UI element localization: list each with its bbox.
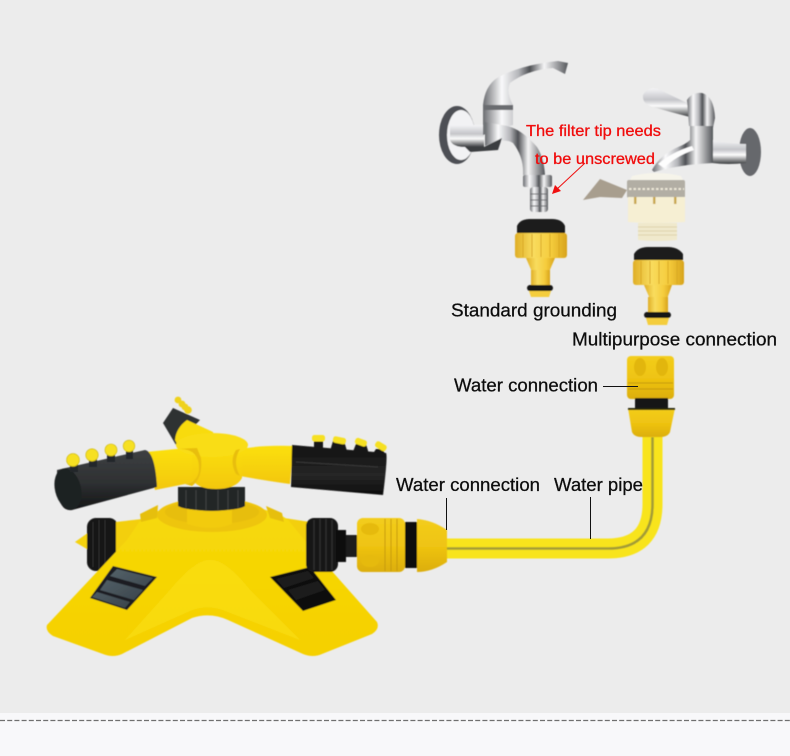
sprinkler back arm — [163, 397, 216, 450]
icon: multipurpose adapter — [633, 247, 684, 325]
icon: universal clamp — [583, 173, 685, 241]
label: multipurpose connection: Multipurpose connection — [572, 330, 777, 350]
sprinkler base — [47, 498, 378, 656]
water pipe — [445, 435, 652, 548]
sprinkler hub — [176, 433, 248, 511]
label: standard grounding: Standard grounding — [451, 300, 617, 320]
label: water connection lower: Water connection — [396, 475, 540, 495]
callout: filter tip note: to be unscrewed — [535, 151, 655, 168]
label: water pipe: Water pipe — [554, 475, 643, 495]
callout: filter tip note: The filter tip needs — [526, 123, 661, 140]
sprinkler left arm — [50, 440, 199, 513]
label: water pipe — [554, 475, 643, 539]
label: water connection upper: Water connection — [454, 376, 598, 396]
icon: sprinkler — [47, 397, 447, 656]
arrow: filter tip — [552, 163, 585, 194]
icon: left faucet — [439, 61, 568, 212]
hose connector: sprinkler side — [306, 518, 447, 572]
icon: right faucet — [643, 88, 761, 176]
icon: standard adapter — [515, 219, 567, 297]
sprinkler right arm — [236, 435, 388, 495]
callout: filter tip note — [526, 123, 661, 168]
hose connector: faucet side — [627, 356, 675, 437]
bottom strip — [0, 713, 790, 756]
